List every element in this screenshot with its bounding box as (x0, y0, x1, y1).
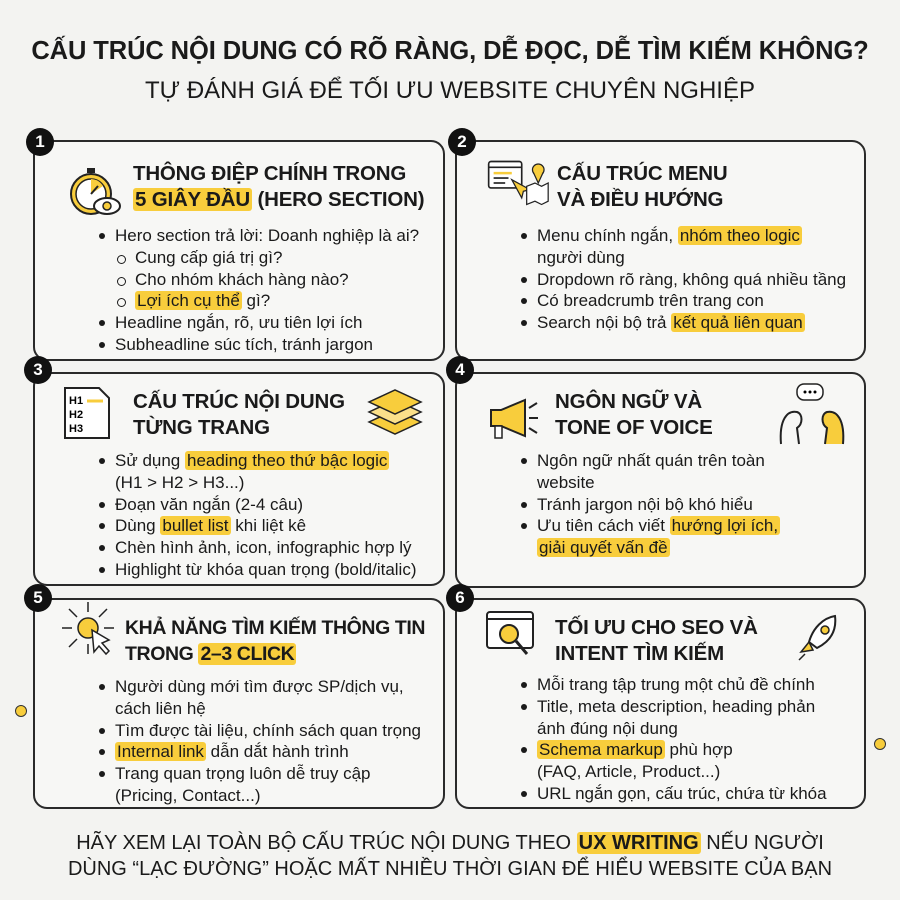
bullet list: Tìm được tài liệu, chính sách quan trọng (115, 721, 421, 740)
bullet list: giải quyết vấn đề (539, 538, 668, 557)
heading: KHẢ NĂNG TÌM KIẾM THÔNG TIN (125, 617, 425, 639)
footer callout: DÙNG “LẠC ĐƯỜNG” HOẶC MẤT NHIỀU THỜI GIAN ĐỂ HIỂU WEBSITE CỦA BẠN (68, 858, 832, 880)
bullet list: Search nội bộ trả kết quả liên quan (537, 313, 803, 332)
number 4: 4 (455, 360, 465, 379)
heading (557, 162, 728, 211)
heading: VÀ ĐIỀU HƯỚNG (557, 188, 723, 211)
bullet list: Hero section trả lời: Doanh nghiệp là ai? (115, 226, 419, 245)
number 3 (24, 356, 52, 384)
heading: TỪNG TRANG (133, 416, 270, 439)
number 1: 1 (35, 132, 45, 151)
heading: 5 GIÂY ĐẦU (HERO SECTION) (135, 188, 424, 211)
bullet list: người dùng (537, 248, 625, 267)
bullet list: Cung cấp giá trị gì? (135, 248, 282, 267)
icon: megaphone (490, 398, 538, 439)
bullet list (99, 451, 416, 579)
icon: people talking (780, 383, 844, 444)
title: CẤU TRÚC NỘI DUNG CÓ RÕ RÀNG, DỄ ĐỌC, DỄ TÌM KIẾM KHÔNG? (31, 37, 869, 65)
number 5 (24, 584, 52, 612)
panel: 2 menu (455, 140, 866, 361)
heading: THÔNG ĐIỆP CHÍNH TRONG (133, 162, 406, 185)
icon: H1 H2 H3 doc: H3 (69, 423, 83, 435)
bullet list: Highlight từ khóa quan trọng (bold/italic) (115, 560, 416, 579)
panel: 5 findability (33, 598, 445, 809)
bullet list: website (537, 473, 595, 492)
icon: rocket (798, 614, 836, 660)
icon: click burst (62, 602, 114, 656)
bullet list (521, 226, 846, 332)
bullet list: Cho nhóm khách hàng nào? (135, 270, 349, 289)
number 4 (446, 356, 474, 384)
number 6 (446, 584, 474, 612)
bullet list (99, 226, 419, 354)
heading (133, 390, 345, 439)
bullet list: URL ngắn gọn, cấu trúc, chứa từ khóa (537, 784, 827, 803)
heading (555, 616, 758, 665)
bullet list: cách liên hệ (115, 699, 206, 718)
icon: menu window and map (488, 160, 549, 206)
heading: INTENT TÌM KIẾM (555, 642, 724, 665)
bullet list: ánh đúng nội dung (537, 719, 678, 738)
bullet list: Dùng bullet list khi liệt kê (115, 516, 306, 535)
panel: 1 hero section (33, 140, 445, 361)
subtitle: TỰ ĐÁNH GIÁ ĐỂ TỐI ƯU WEBSITE CHUYÊN NGHIỆP (145, 77, 755, 104)
icon: H1 H2 H3 doc (64, 387, 110, 439)
bullet list: Đoạn văn ngắn (2-4 câu) (115, 495, 303, 514)
bullet list: Title, meta description, heading phản (537, 697, 815, 716)
icon: H1 H2 H3 doc: H2 (69, 409, 83, 421)
bullet list: (H1 > H2 > H3...) (115, 473, 244, 492)
footer callout: HÃY XEM LẠI TOÀN BỘ CẤU TRÚC NỘI DUNG THEO UX WRITING NẾU NGƯỜI (76, 832, 824, 854)
bullet list: (Pricing, Contact...) (115, 786, 260, 805)
number 6: 6 (455, 588, 465, 607)
number 2: 2 (457, 132, 467, 151)
bullet list: Mỗi trang tập trung một chủ đề chính (537, 675, 815, 694)
panel: 4 tone of voice (455, 372, 866, 588)
heading: TRONG 2–3 CLICK (125, 643, 294, 665)
bullet list (521, 451, 780, 557)
bullet list: Trang quan trọng luôn dễ truy cập (115, 764, 370, 783)
bullet list: Headline ngắn, rõ, ưu tiên lợi ích (115, 313, 362, 332)
panel: 6 SEO (455, 598, 866, 809)
bullet list: Người dùng mới tìm được SP/dịch vụ, (115, 677, 404, 696)
heading: TỐI ƯU CHO SEO VÀ (555, 616, 758, 639)
icon: stopwatch eye (70, 168, 121, 215)
footer callout (68, 830, 832, 880)
number 1 (26, 128, 54, 156)
bullet list: Internal link dẫn dắt hành trình (117, 742, 349, 761)
icon: H1 H2 H3 doc: H1 (69, 395, 83, 407)
heading: CẤU TRÚC NỘI DUNG (133, 390, 345, 413)
bullet list: Chèn hình ảnh, icon, infographic hợp lý (115, 538, 412, 557)
bullet list: Có breadcrumb trên trang con (537, 291, 764, 310)
bullet list: Lợi ích cụ thể gì? (137, 291, 270, 310)
bullet list: Ngôn ngữ nhất quán trên toàn (537, 451, 765, 470)
number 5: 5 (33, 588, 43, 607)
number 3: 3 (33, 360, 43, 379)
bullet list: Tránh jargon nội bộ khó hiểu (537, 495, 753, 514)
heading (555, 390, 713, 439)
bullet list (99, 677, 421, 805)
heading (125, 616, 425, 665)
heading: NGÔN NGỮ VÀ (555, 390, 702, 413)
heading (133, 162, 424, 211)
bullet list: Ưu tiên cách viết hướng lợi ích, (537, 516, 778, 535)
heading: TONE OF VOICE (555, 416, 713, 439)
bullet list: Menu chính ngắn, nhóm theo logic (537, 226, 800, 245)
bullet list: Dropdown rõ ràng, không quá nhiều tầng (537, 270, 846, 289)
bullet list: Subheadline súc tích, tránh jargon (115, 335, 373, 354)
number 2 (448, 128, 476, 156)
panel: 3 page structure (33, 372, 445, 586)
bullet list: (FAQ, Article, Product...) (537, 762, 720, 781)
bullet list: Sử dụng heading theo thứ bậc logic (115, 451, 387, 470)
decoration: yellow dots (15, 705, 27, 717)
bullet list: Schema markup phù hợp (539, 740, 733, 759)
bullet list (521, 675, 827, 803)
icon: layers (367, 389, 423, 435)
icon: search window (486, 611, 534, 655)
heading: CẤU TRÚC MENU (557, 162, 728, 185)
